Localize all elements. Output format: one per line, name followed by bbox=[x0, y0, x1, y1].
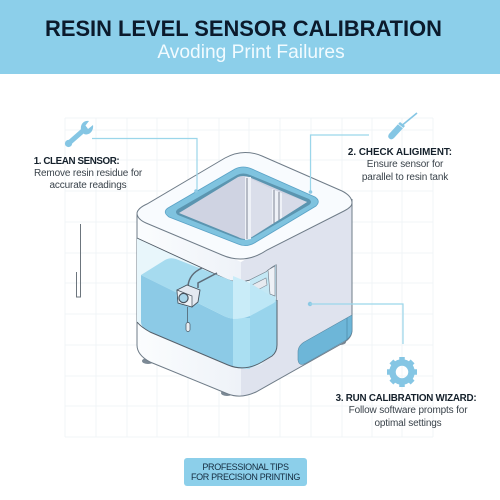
step 1 text bbox=[34, 156, 142, 191]
callout line 3 bbox=[308, 302, 403, 344]
callout line 2 bbox=[309, 135, 369, 194]
step 3 text: Follow software prompts for bbox=[349, 405, 467, 416]
side slot bbox=[250, 265, 276, 300]
front window bbox=[137, 238, 276, 368]
step 1 text: accurate readings bbox=[50, 180, 126, 191]
step 3 text: 3. RUN CALIBRATION WIZARD: bbox=[336, 393, 476, 404]
base compartment bbox=[298, 315, 352, 364]
level sensor bbox=[177, 268, 217, 332]
step 2 text bbox=[348, 147, 452, 183]
title: RESIN LEVEL SENSOR CALIBRATION bbox=[45, 16, 442, 41]
header banner bbox=[0, 0, 500, 74]
subtitle: Avoding Print Failures bbox=[157, 42, 345, 63]
footer badge bbox=[184, 458, 307, 486]
resin tank opening bbox=[165, 167, 318, 246]
printer body bbox=[137, 199, 352, 396]
step 2 text: Ensure sensor for bbox=[367, 159, 443, 170]
footer badge: FOR PRECISION PRINTING bbox=[191, 472, 300, 482]
icon: gear bbox=[387, 357, 417, 387]
step 1 text: Remove resin residue for bbox=[34, 168, 142, 179]
stray vertical marks bbox=[76, 224, 80, 297]
callout line 1 bbox=[92, 138, 198, 193]
footer badge: PROFESSIONAL TIPS bbox=[202, 462, 289, 472]
icon: wrench bbox=[65, 121, 93, 147]
step 2 text: 2. CHECK ALIGIMENT: bbox=[348, 147, 452, 158]
step 2 text: parallel to resin tank bbox=[362, 172, 448, 183]
step 1 text: 1. CLEAN SENSOR: bbox=[34, 156, 119, 166]
icon: screwdriver bbox=[388, 113, 417, 139]
step 3 text bbox=[336, 393, 476, 429]
printer top face bbox=[137, 152, 352, 259]
resin tank bbox=[137, 258, 277, 369]
step 3 text: optimal settings bbox=[374, 418, 442, 429]
